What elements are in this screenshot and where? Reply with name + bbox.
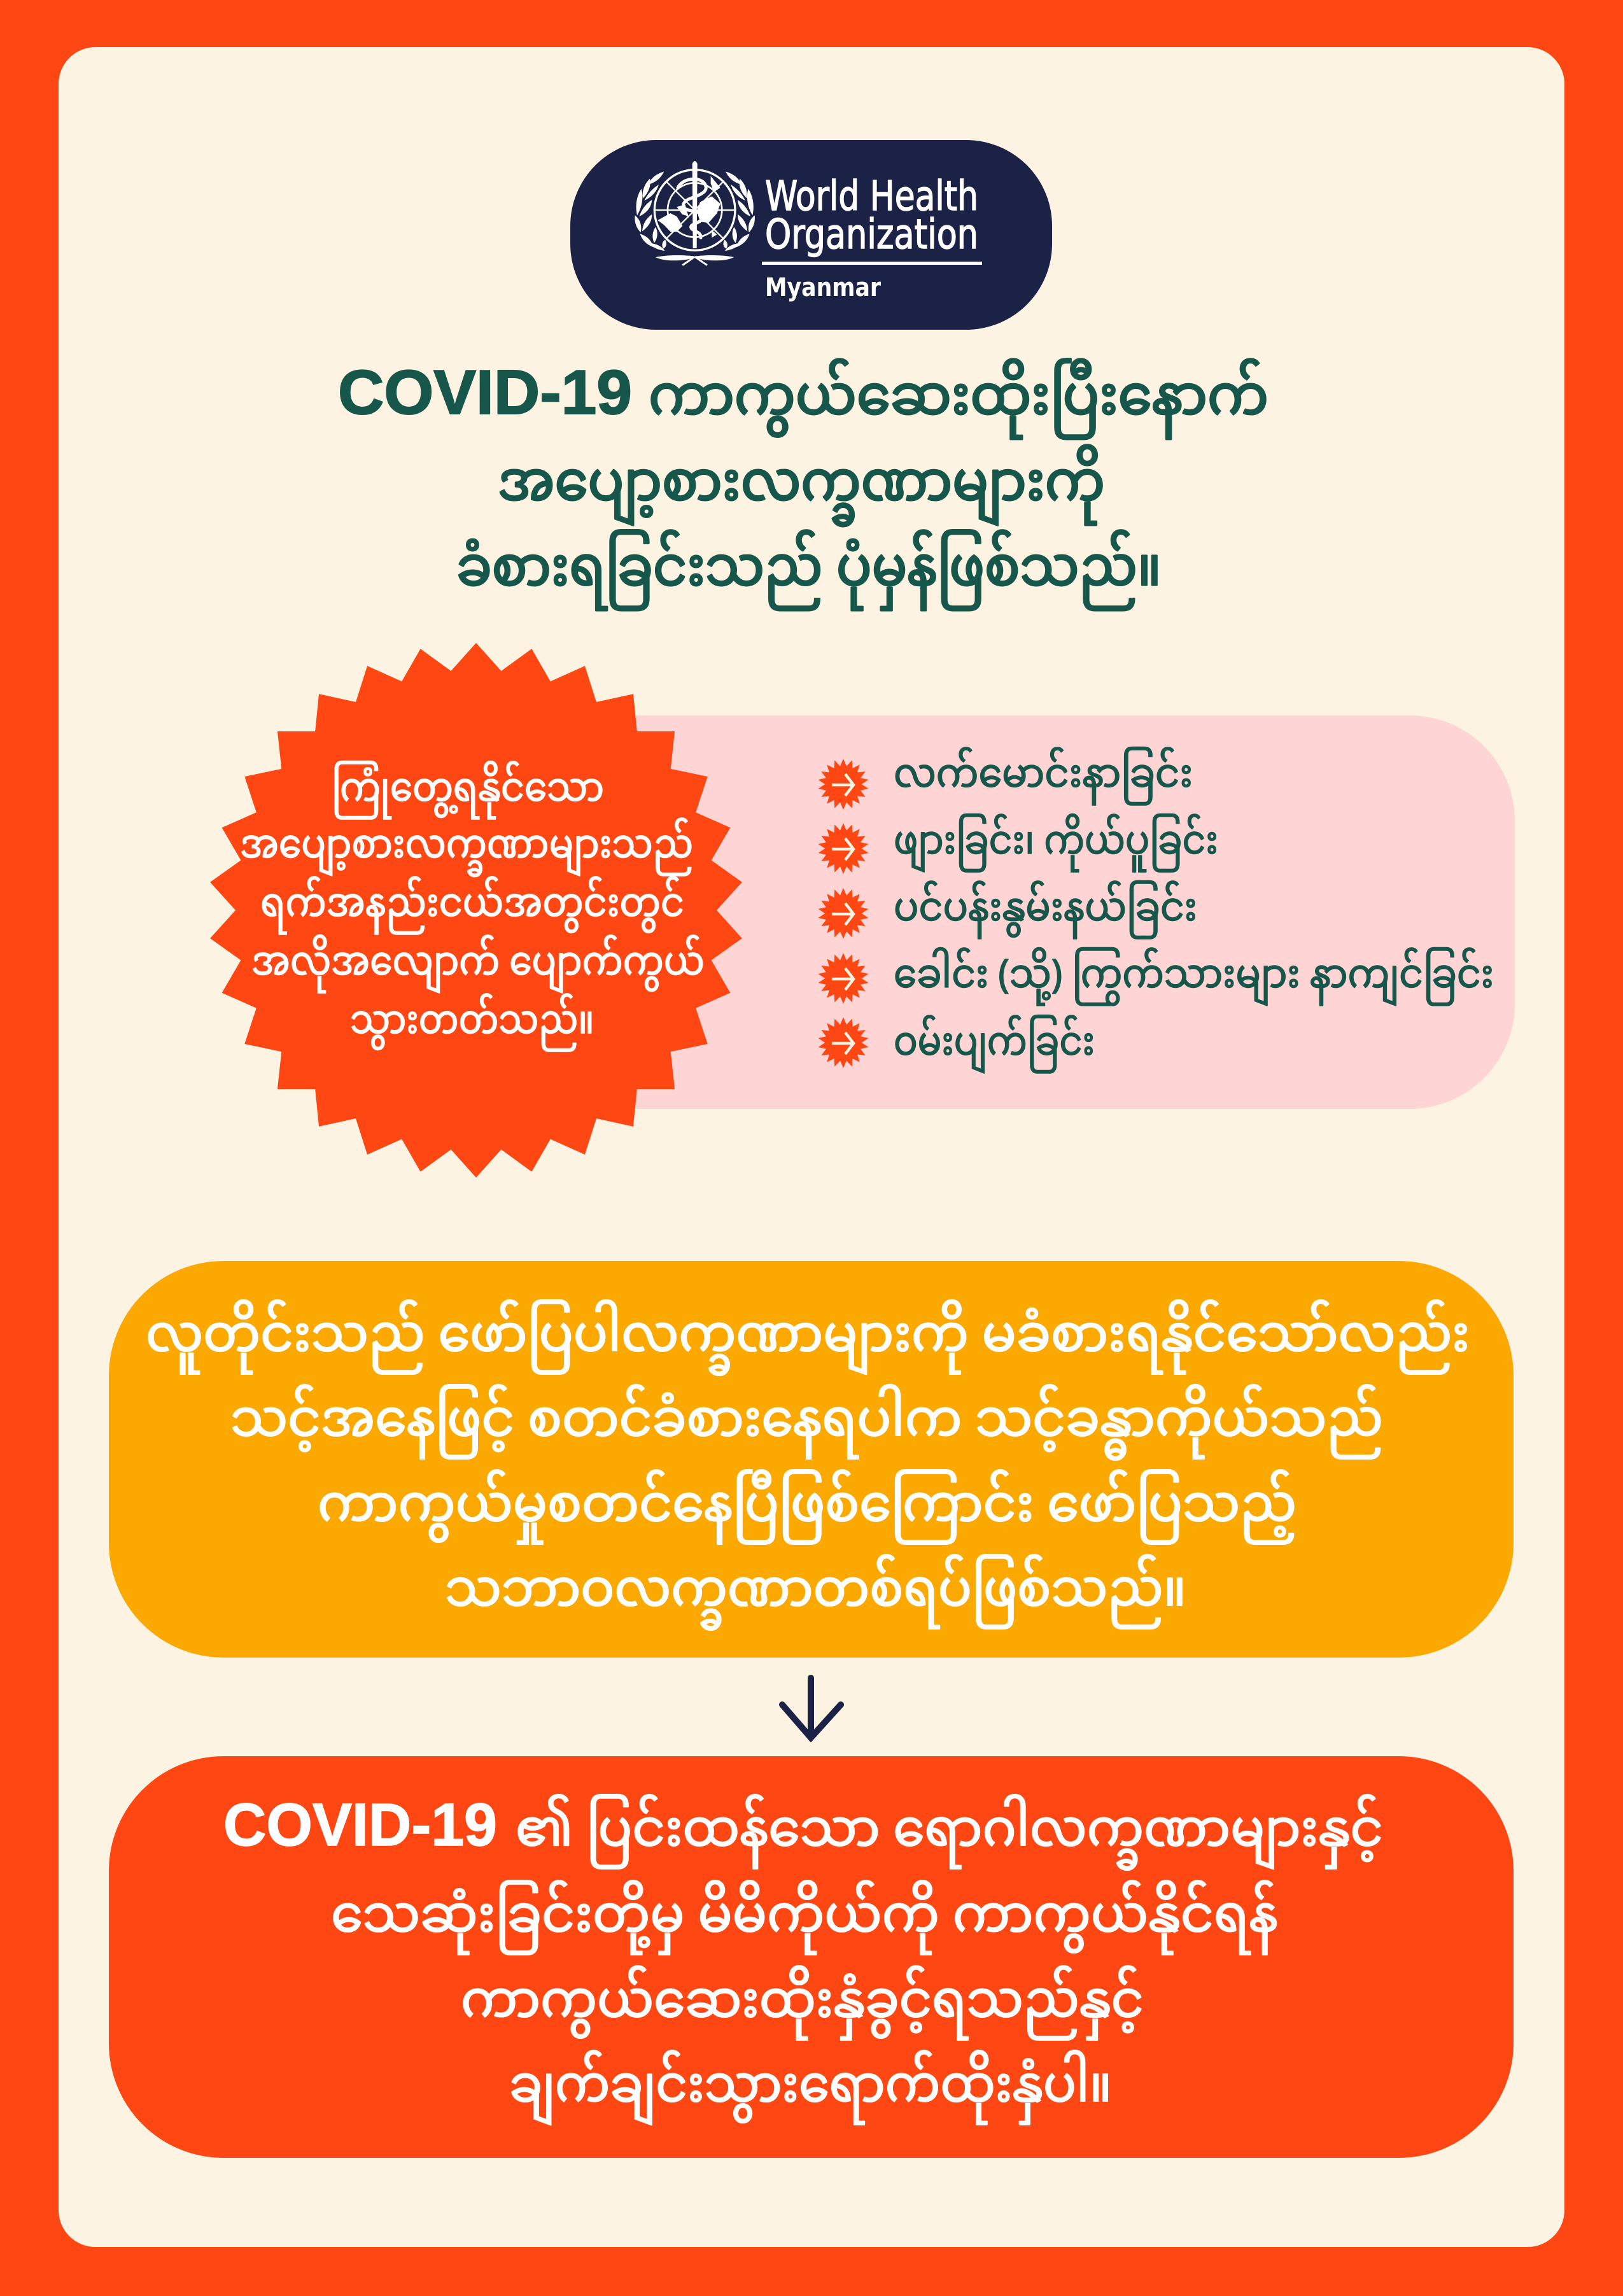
title: ကာကွယ်ဆေးထိုးပြီးနောက်: [649, 341, 1268, 461]
title: ခံစားရခြင်းသည် ပုံမှန်ဖြစ်သည်။: [456, 512, 1162, 632]
symptom 2: ဖျားခြင်း၊ ကိုယ်ပူခြင်း: [894, 802, 1218, 888]
starburst text: ကြုံတွေ့ရနိုင်သော: [332, 749, 604, 835]
WHO Myanmar logo badge: [570, 140, 1052, 330]
message text: သဘာဝလက္ခဏာတစ်ရပ်ဖြစ်သည်။: [445, 1538, 1186, 1649]
symptom 5: [819, 1003, 1095, 1089]
panel: reassurance message: [109, 1261, 1514, 1658]
call to action text: ကာကွယ်ဆေးထိုးနှံခွင့်ရသည်နှင့်: [461, 1949, 1144, 2060]
logo wordmark: [762, 173, 982, 302]
starburst text: အပျော့စားလက္ခဏာများသည်: [240, 806, 693, 892]
title: [338, 341, 1268, 632]
call to action text: [223, 1778, 1383, 2145]
call to action text: ချက်ချင်းသွားရောက်ထိုးနှံပါ။: [509, 2034, 1112, 2145]
panel: call to action: [109, 1756, 1514, 2158]
arrow: down: [782, 1678, 841, 1738]
starburst text: [240, 749, 705, 1067]
call to action text: ၏ ပြင်းထန်သော ရောဂါလက္ခဏာများနှင့်: [516, 1778, 1383, 1889]
symptom 3: ပင်ပန်းနွမ်းနယ်ခြင်း: [894, 869, 1197, 955]
message text: ကာကွယ်မှုစတင်နေပြီဖြစ်ကြောင်း ဖော်ပြသည့်: [318, 1453, 1296, 1565]
starburst text: အလိုအလျောက် ပျောက်ကွယ်: [251, 923, 705, 1009]
message text: လူတိုင်းသည် ဖော်ပြပါလက္ခဏာများကို မခံစားရနိုင်သော်လည်း: [146, 1283, 1470, 1395]
call to action text: သေဆုံးခြင်းတို့မှ မိမိကိုယ်ကို ကာကွယ်နိုင်ရန်: [331, 1864, 1278, 1975]
logo wordmark: Myanmar: [765, 273, 881, 302]
starburst callout: [210, 643, 742, 1178]
logo wordmark: World Health: [765, 173, 978, 220]
icon: WHO emblem: [635, 161, 755, 265]
call to action text: COVID-19: [223, 1791, 497, 1859]
symptom 1: လက်မောင်းနာခြင်း: [894, 735, 1193, 821]
symptom 4: ခေါင်း (သို့) ကြွက်သားများ နာကျင်ခြင်း: [894, 936, 1494, 1022]
title: အပျော့စားလက္ခဏာများကို: [498, 427, 1105, 547]
starburst text: သွားတတ်သည်။: [350, 982, 594, 1067]
starburst text: ရက်အနည်းငယ်အတွင်းတွင်: [260, 864, 684, 950]
message text: [146, 1283, 1470, 1649]
message text: သင့်အနေဖြင့် စတင်ခံစားနေရပါက သင့်ခန္ဓာကိုယ်သည်: [230, 1368, 1383, 1479]
title: COVID-19: [338, 357, 632, 427]
symptom 5: ဝမ်းပျက်ခြင်း: [894, 1003, 1095, 1089]
panel: symptoms list: [509, 715, 1515, 1109]
logo wordmark: Organization: [765, 211, 978, 258]
